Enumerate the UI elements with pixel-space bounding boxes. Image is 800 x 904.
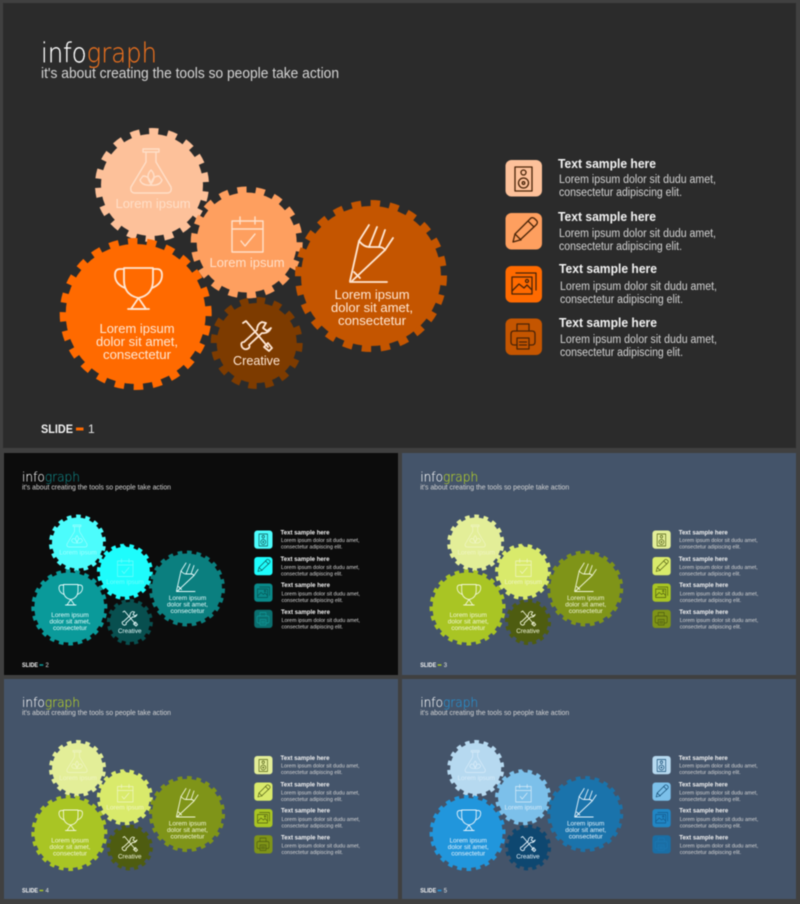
gear: tools: Creative bbox=[516, 628, 540, 635]
slide number: SLIDE bbox=[420, 663, 436, 669]
panel: slide 5 background bbox=[402, 679, 796, 899]
title: infograph bbox=[22, 470, 80, 486]
gear: calendar: Lorem ipsum bbox=[504, 579, 542, 586]
list item 4: consectetur adipiscing elit. bbox=[680, 624, 742, 630]
list item 3: consectetur adipiscing elit. bbox=[560, 294, 683, 306]
gear: flask bbox=[98, 132, 206, 238]
list item 2 bbox=[254, 556, 360, 578]
title: infograph bbox=[22, 695, 80, 711]
panel: slide 1 background bbox=[3, 3, 796, 448]
gear: tools: Creative bbox=[118, 628, 142, 635]
list item 1: Lorem ipsum dolor sit dudu amet, bbox=[281, 538, 360, 544]
list item 4 bbox=[254, 609, 360, 630]
gear: trophy: consectetur bbox=[53, 625, 88, 632]
subtitle: it's about creating the tools so people take action bbox=[420, 482, 569, 492]
gear: trophy: consectetur bbox=[451, 850, 486, 858]
gear: pencil: Lorem ipsum bbox=[567, 820, 604, 828]
gear: trophy bbox=[431, 797, 504, 869]
list item 1: Text sample here bbox=[679, 530, 728, 536]
list item 2: Text sample here bbox=[558, 209, 656, 224]
slide number: 2 bbox=[46, 663, 50, 669]
list item 3: Lorem ipsum dolor sit dudu amet, bbox=[680, 817, 759, 823]
subtitle: it's about creating the tools so people take action bbox=[22, 482, 171, 492]
list item 2: Lorem ipsum dolor sit dudu amet, bbox=[559, 228, 716, 240]
list item 3: Lorem ipsum dolor sit dudu amet, bbox=[282, 592, 360, 598]
list item 4: Text sample here bbox=[559, 315, 657, 330]
gear: trophy: dolor sit amet, bbox=[50, 844, 91, 851]
slide number: 3 bbox=[444, 663, 448, 669]
gear: pencil bbox=[151, 778, 223, 850]
gear: calendar bbox=[497, 771, 549, 824]
gear: trophy: dolor sit amet, bbox=[448, 844, 489, 851]
list item 2: Lorem ipsum dolor sit dudu amet, bbox=[679, 790, 758, 796]
list item 4: Lorem ipsum dolor sit dudu amet, bbox=[282, 844, 360, 850]
gear: flask bbox=[51, 742, 104, 795]
panel: slide 2 background bbox=[4, 453, 398, 675]
slide number bbox=[420, 663, 448, 669]
gear: trophy bbox=[33, 571, 106, 644]
list item 4: Lorem ipsum dolor sit dudu amet, bbox=[282, 618, 360, 624]
gear: trophy bbox=[33, 797, 106, 869]
list item 3 bbox=[652, 582, 759, 604]
list item 1: consectetur adipiscing elit. bbox=[559, 187, 682, 199]
list item 4: Lorem ipsum dolor sit dudu amet, bbox=[560, 334, 717, 346]
slide number bbox=[22, 663, 50, 669]
gear: pencil: dolor sit amet, bbox=[331, 300, 413, 315]
gear: tools: Creative bbox=[233, 353, 280, 368]
gear: flask: Lorem ipsum bbox=[116, 196, 190, 211]
gear: calendar bbox=[194, 190, 299, 295]
list item 1: Text sample here bbox=[280, 530, 330, 536]
list item 3 bbox=[652, 808, 759, 830]
gear: tools bbox=[109, 826, 151, 869]
gear: trophy: dolor sit amet, bbox=[96, 334, 178, 349]
list item 4: consectetur adipiscing elit. bbox=[282, 624, 343, 630]
list item 4: consectetur adipiscing elit. bbox=[680, 850, 742, 856]
list item 4 bbox=[506, 315, 717, 359]
list item 2: Text sample here bbox=[280, 556, 330, 563]
list item 1 bbox=[506, 156, 716, 199]
gear: tools bbox=[507, 601, 549, 643]
gear: flask: Lorem ipsum bbox=[457, 550, 495, 556]
gear: pencil: consectetur bbox=[569, 834, 604, 840]
gear: tools: Creative bbox=[516, 854, 540, 860]
list item 3 bbox=[254, 808, 360, 830]
list item 2: consectetur adipiscing elit. bbox=[679, 572, 741, 578]
list item 4: Text sample here bbox=[281, 834, 330, 842]
gear: tools bbox=[507, 826, 549, 869]
list item 1: Text sample here bbox=[280, 755, 330, 762]
list item 3: Text sample here bbox=[679, 582, 729, 589]
gear: pencil bbox=[298, 204, 444, 348]
list item 3: consectetur adipiscing elit. bbox=[282, 598, 343, 604]
list item 1: consectetur adipiscing elit. bbox=[679, 544, 741, 550]
title: infograph bbox=[420, 695, 478, 711]
list item 3: Lorem ipsum dolor sit dudu amet, bbox=[282, 817, 360, 823]
list item 2: Lorem ipsum dolor sit dudu amet, bbox=[679, 565, 758, 571]
list item 3: Lorem ipsum dolor sit dudu amet, bbox=[680, 592, 759, 598]
list item 2 bbox=[652, 782, 758, 803]
slide number bbox=[41, 422, 95, 436]
gear: flask: Lorem ipsum bbox=[59, 775, 97, 782]
list item 4: consectetur adipiscing elit. bbox=[560, 347, 683, 359]
list item 1 bbox=[254, 530, 360, 550]
gear: tools bbox=[109, 601, 151, 643]
list item 1: Lorem ipsum dolor sit dudu amet, bbox=[559, 174, 716, 186]
gear: pencil bbox=[151, 552, 223, 625]
gear: tools bbox=[214, 300, 299, 386]
list item 1: consectetur adipiscing elit. bbox=[281, 544, 343, 550]
gear: pencil: consectetur bbox=[569, 608, 604, 615]
slide 1 bbox=[41, 38, 717, 436]
gear: calendar bbox=[99, 771, 151, 824]
slide 5 bbox=[420, 695, 759, 894]
list item 2: consectetur adipiscing elit. bbox=[281, 572, 343, 578]
list item 3 bbox=[254, 582, 360, 604]
list item 1: Text sample here bbox=[558, 156, 656, 171]
gear: pencil: Lorem ipsum bbox=[334, 287, 410, 302]
list item 3: consectetur adipiscing elit. bbox=[680, 598, 742, 604]
list item 2: consectetur adipiscing elit. bbox=[679, 797, 741, 803]
slide number: 1 bbox=[88, 422, 95, 436]
list item 2: Lorem ipsum dolor sit dudu amet, bbox=[281, 565, 360, 571]
gear: pencil: consectetur bbox=[170, 834, 205, 840]
gear: tools: Creative bbox=[118, 854, 142, 860]
list item 2 bbox=[254, 782, 360, 803]
gear: flask bbox=[51, 516, 104, 570]
list item 3: Text sample here bbox=[679, 808, 729, 814]
gear: trophy: consectetur bbox=[53, 850, 88, 858]
list item 3: Text sample here bbox=[281, 582, 330, 589]
gear: pencil: dolor sit amet, bbox=[565, 602, 606, 608]
slide number: SLIDE bbox=[22, 663, 38, 669]
list item 1: Lorem ipsum dolor sit dudu amet, bbox=[679, 764, 758, 770]
gear: pencil: dolor sit amet, bbox=[565, 827, 606, 834]
list item 2: consectetur adipiscing elit. bbox=[559, 241, 682, 253]
slide number: SLIDE bbox=[22, 888, 38, 894]
slide number: SLIDE bbox=[41, 422, 73, 436]
subtitle: it's about creating the tools so people take action bbox=[22, 708, 171, 717]
list item 2: consectetur adipiscing elit. bbox=[281, 797, 343, 803]
list item 4: consectetur adipiscing elit. bbox=[282, 850, 343, 856]
gear: flask: Lorem ipsum bbox=[457, 775, 495, 782]
gear: trophy: dolor sit amet, bbox=[50, 618, 91, 626]
list item 2: Text sample here bbox=[679, 556, 728, 563]
subtitle: it's about creating the tools so people take action bbox=[420, 708, 569, 717]
gear: pencil: consectetur bbox=[170, 608, 205, 615]
list item 1 bbox=[652, 755, 758, 776]
list item 4 bbox=[652, 834, 759, 856]
list item 1 bbox=[254, 755, 360, 776]
list item 2: Lorem ipsum dolor sit dudu amet, bbox=[281, 790, 360, 796]
gear: pencil bbox=[549, 552, 621, 625]
list item 4: Text sample here bbox=[679, 609, 729, 616]
gear: calendar: Lorem ipsum bbox=[504, 804, 542, 812]
gear: calendar: Lorem ipsum bbox=[106, 579, 144, 586]
gear: trophy: consectetur bbox=[103, 347, 172, 362]
slide number: 4 bbox=[46, 888, 50, 894]
gear: calendar: Lorem ipsum bbox=[210, 255, 284, 270]
list item 3: consectetur adipiscing elit. bbox=[680, 824, 742, 830]
list item 1: Text sample here bbox=[679, 755, 728, 762]
gear: pencil bbox=[549, 778, 621, 850]
gear: flask bbox=[449, 516, 502, 570]
list item 4 bbox=[254, 834, 360, 856]
slide 2 bbox=[22, 470, 360, 669]
list item 1: Lorem ipsum dolor sit dudu amet, bbox=[281, 764, 360, 770]
gear: trophy bbox=[63, 242, 208, 386]
list item 1: consectetur adipiscing elit. bbox=[281, 770, 343, 776]
slide 4 bbox=[22, 695, 360, 894]
gear: pencil: consectetur bbox=[338, 313, 407, 328]
list item 2: Text sample here bbox=[280, 782, 330, 788]
list item 1 bbox=[652, 530, 758, 550]
list item 4: Lorem ipsum dolor sit dudu amet, bbox=[680, 844, 759, 850]
gear: pencil: dolor sit amet, bbox=[167, 602, 208, 608]
gear: pencil: Lorem ipsum bbox=[567, 595, 604, 602]
gear: calendar bbox=[99, 546, 151, 598]
panel: slide 3 background bbox=[402, 453, 796, 675]
list item 4: Text sample here bbox=[679, 834, 729, 842]
subtitle: it's about creating the tools so people take action bbox=[41, 66, 339, 82]
list item 4: Lorem ipsum dolor sit dudu amet, bbox=[680, 618, 759, 624]
list item 1: Lorem ipsum dolor sit dudu amet, bbox=[679, 538, 758, 544]
list item 3: consectetur adipiscing elit. bbox=[282, 824, 343, 830]
gear: trophy bbox=[431, 571, 504, 644]
gear: trophy: consectetur bbox=[451, 625, 486, 632]
gear: trophy: Lorem ipsum bbox=[449, 838, 487, 844]
list item 1: consectetur adipiscing elit. bbox=[679, 770, 741, 776]
gear: trophy: Lorem ipsum bbox=[100, 321, 174, 336]
list item 3: Text sample here bbox=[281, 808, 330, 814]
gear: flask bbox=[449, 742, 502, 795]
gear: pencil: Lorem ipsum bbox=[169, 820, 206, 828]
gear: flask: Lorem ipsum bbox=[59, 550, 97, 556]
gear: trophy: Lorem ipsum bbox=[449, 612, 487, 619]
slide 3 bbox=[420, 470, 759, 669]
panel: slide 4 background bbox=[4, 679, 398, 899]
list item 4: Text sample here bbox=[281, 609, 330, 616]
title: infograph bbox=[420, 470, 478, 486]
slide number: 5 bbox=[444, 888, 448, 894]
list item 2: Text sample here bbox=[679, 782, 728, 788]
list item 3: Text sample here bbox=[559, 261, 657, 276]
gear: pencil: Lorem ipsum bbox=[169, 595, 206, 602]
title: infograph bbox=[41, 38, 157, 69]
list item 3: Lorem ipsum dolor sit dudu amet, bbox=[560, 281, 717, 293]
gear: calendar bbox=[497, 546, 549, 598]
list item 3 bbox=[506, 261, 717, 306]
list item 2 bbox=[652, 556, 758, 578]
slide number bbox=[420, 888, 448, 894]
list item 4 bbox=[652, 609, 759, 630]
gear: trophy: Lorem ipsum bbox=[51, 612, 89, 619]
gear: pencil: dolor sit amet, bbox=[167, 827, 208, 834]
gear: trophy: dolor sit amet, bbox=[448, 618, 489, 626]
list item 2 bbox=[506, 209, 716, 253]
slide number: SLIDE bbox=[420, 888, 436, 894]
gear: calendar: Lorem ipsum bbox=[106, 804, 144, 812]
slide number bbox=[22, 888, 50, 894]
gear: trophy: Lorem ipsum bbox=[51, 838, 89, 844]
